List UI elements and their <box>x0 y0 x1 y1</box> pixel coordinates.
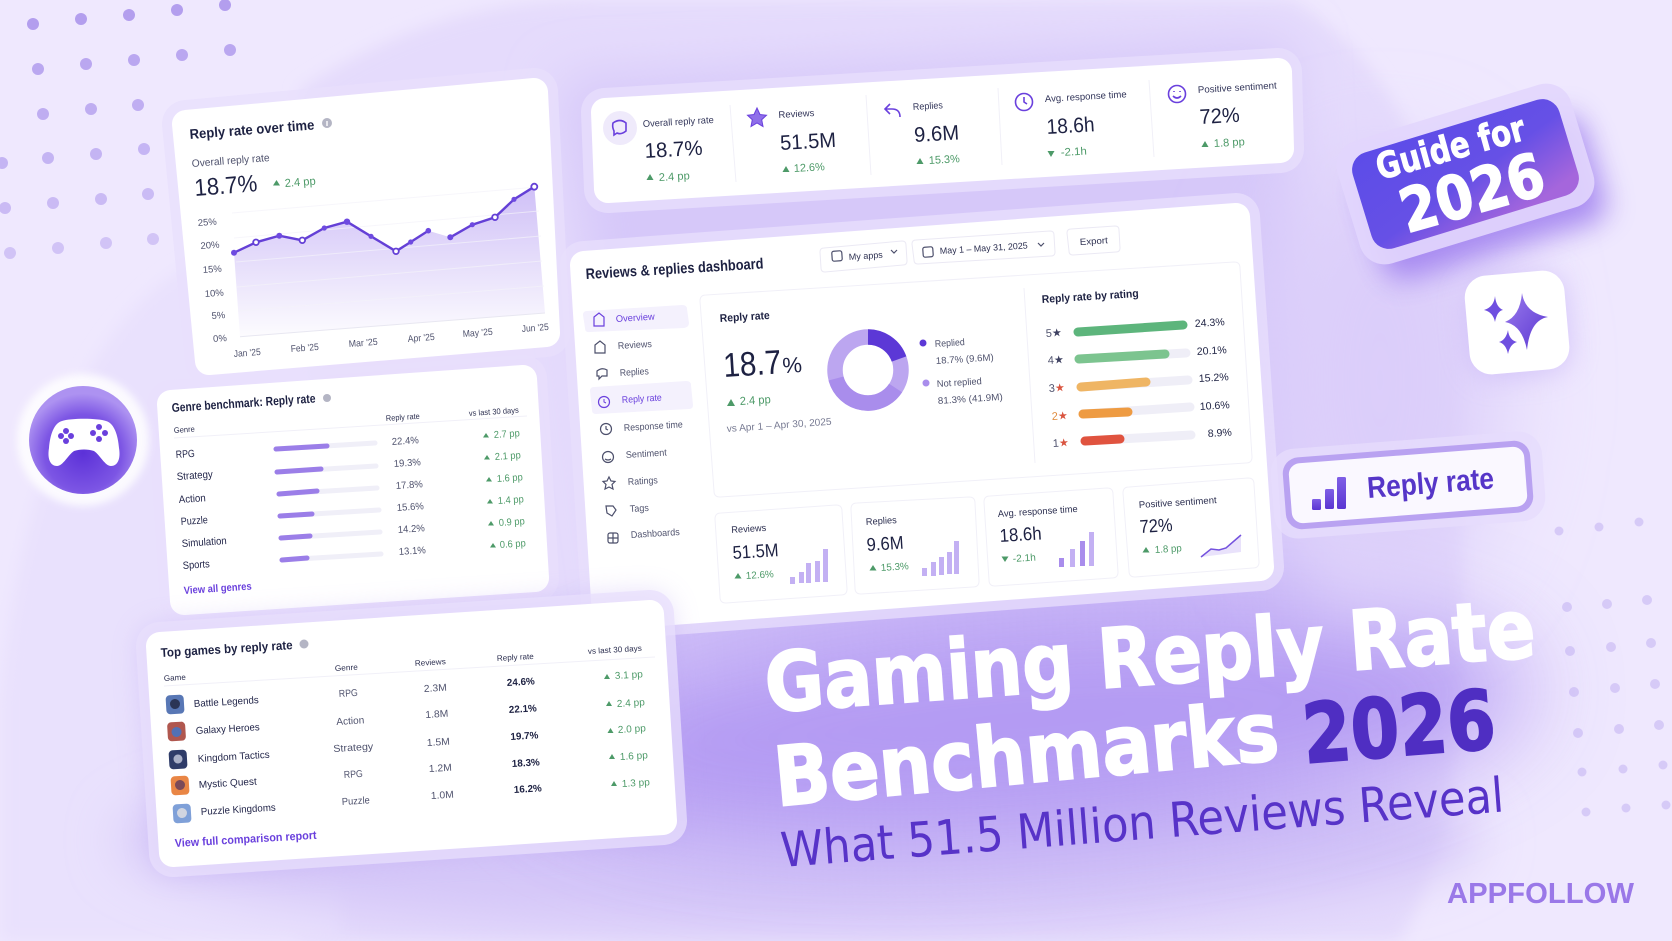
game names: Battle Legends <box>194 695 259 710</box>
rating labels <box>1045 316 1232 450</box>
main title: 2026 <box>1299 673 1499 783</box>
mini card: positive sentiment: 72% <box>1139 514 1173 537</box>
info icon <box>322 118 332 128</box>
mini card: response time: -2.1h <box>1012 553 1036 565</box>
reply rate value: 18.7% <box>722 342 803 385</box>
panel: reviews and replies dashboard <box>583 217 1260 616</box>
game reply rates: 19.7% <box>510 730 539 743</box>
mini card: reviews: 12.6% <box>745 569 774 582</box>
genre values: 22.4% <box>391 435 419 448</box>
game changes: 1.3 pp <box>622 777 651 790</box>
kpi: reviews: Reviews <box>778 108 815 121</box>
table headers: Genre <box>335 663 359 673</box>
donut legend: Replied <box>934 337 965 350</box>
game names: Puzzle Kingdoms <box>201 803 276 818</box>
nav tags: Tags <box>630 503 649 515</box>
mini card: response time <box>984 488 1118 586</box>
rating labels: 5★ <box>1045 327 1062 340</box>
genre values: 17.8% <box>395 479 423 492</box>
genre changes: 1.4 pp <box>497 494 525 507</box>
mini card: response time: Avg. response time <box>997 504 1078 520</box>
comparison period: vs Apr 1 – Apr 30, 2025 <box>726 417 832 435</box>
kpi: replies: Replies <box>913 100 943 113</box>
game reply rates <box>507 676 542 796</box>
genre names: Strategy <box>176 469 214 483</box>
game review counts: 1.2M <box>429 763 452 775</box>
my apps dropdown: My apps <box>848 250 884 262</box>
mini card: response time: 18.6h <box>999 522 1042 546</box>
main title: Benchmarks <box>770 685 1283 826</box>
overall value: 18.7% <box>193 170 258 202</box>
view all genres link: View all genres <box>183 581 252 597</box>
icon: sparkle tile <box>1463 269 1572 379</box>
x axis labels: Mar '25 <box>348 337 378 350</box>
game genres: RPG <box>344 769 363 781</box>
kpi: positive sentiment <box>1168 80 1277 150</box>
game review counts <box>424 683 454 802</box>
y axis labels: 0% <box>213 333 228 345</box>
game review counts: 2.3M <box>424 683 447 695</box>
game changes: 1.6 pp <box>620 750 649 763</box>
nav tags <box>606 503 649 516</box>
badge: guide for 2026: Guide for <box>1371 108 1530 189</box>
nav reply rate <box>598 393 662 408</box>
game reply rates: 24.6% <box>507 676 535 689</box>
game genres: Strategy <box>333 742 374 755</box>
decorative dots top left <box>0 0 236 259</box>
y axis labels: 15% <box>202 264 223 276</box>
genre values: 19.3% <box>393 457 421 470</box>
nav reply rate: Reply rate <box>622 393 662 406</box>
game genres <box>333 688 374 808</box>
kpi: overall reply rate: Overall reply rate <box>643 115 714 130</box>
nav sentiment: Sentiment <box>626 447 667 461</box>
rating labels: 8.9% <box>1207 427 1232 440</box>
kpi: reviews: 51.5M <box>779 129 837 155</box>
game changes: 2.0 pp <box>618 723 647 736</box>
genre changes: 2.7 pp <box>493 428 521 441</box>
game changes <box>604 669 651 790</box>
panel: genre benchmark <box>171 379 535 601</box>
table headers: vs last 30 days <box>588 644 642 656</box>
y axis labels: 10% <box>204 288 225 300</box>
table headers <box>164 644 655 686</box>
reply rate heading: Reply rate <box>719 310 770 325</box>
kpi: average response time: 18.6h <box>1046 113 1095 139</box>
nav overview <box>594 312 655 326</box>
game changes: 2.4 pp <box>617 697 646 710</box>
kpi: overall reply rate: 18.7% <box>644 137 703 163</box>
x axis labels: Apr '25 <box>407 332 435 345</box>
game genres: RPG <box>339 688 358 700</box>
nav overview: Overview <box>616 312 655 325</box>
rating heading: Reply rate by rating <box>1041 288 1139 306</box>
kpi: reviews <box>748 108 837 175</box>
export button <box>1067 226 1120 255</box>
y axis labels: 5% <box>211 310 226 322</box>
mini card: reviews: Reviews <box>731 523 767 536</box>
game names <box>194 695 276 818</box>
y axis labels <box>197 217 228 345</box>
nav replies: Replies <box>620 366 649 379</box>
panel: top games by reply rate <box>160 614 663 853</box>
genre names: Simulation <box>181 535 227 550</box>
x axis labels <box>233 322 549 360</box>
genre names: Puzzle <box>180 514 208 528</box>
rating labels: 10.6% <box>1199 399 1230 413</box>
my apps dropdown <box>820 241 907 272</box>
nav dashboards <box>608 527 680 543</box>
nav response time <box>600 419 683 434</box>
x axis labels: Jan '25 <box>233 347 261 360</box>
donut legend: 18.7% (9.6M) <box>935 352 994 367</box>
date dropdown: May 1 – May 31, 2025 <box>939 240 1028 256</box>
genre headers <box>174 406 527 438</box>
badge: guide for 2026: 2026 <box>1392 140 1553 247</box>
kpi: positive sentiment: Positive sentiment <box>1198 80 1277 96</box>
donut chart <box>835 337 901 403</box>
kpi: positive sentiment: 1.8 pp <box>1213 136 1245 150</box>
nav ratings: Ratings <box>628 475 658 488</box>
rating labels: 4★ <box>1047 354 1064 367</box>
rating labels: 20.1% <box>1196 344 1227 358</box>
game review counts: 1.5M <box>427 737 450 749</box>
kpi: replies: 15.3% <box>928 153 960 167</box>
game reply rates: 16.2% <box>514 783 542 796</box>
genre changes: 2.1 pp <box>494 450 522 463</box>
main title <box>762 582 1538 826</box>
genre bars <box>276 443 381 560</box>
reply rate and rating box <box>700 262 1252 497</box>
game genres: Action <box>336 715 365 728</box>
icon: game controller badge <box>17 374 149 506</box>
kpi: reviews: 12.6% <box>793 161 825 175</box>
subtitle: What 51.5 Million Reviews Reveal <box>779 768 1506 879</box>
mini card: positive sentiment <box>1123 478 1259 577</box>
genre names: Sports <box>182 558 210 572</box>
genre info icon <box>323 394 331 402</box>
nav reviews <box>595 339 652 353</box>
y axis labels: 25% <box>197 217 218 229</box>
nav sentiment <box>602 447 667 462</box>
game icons <box>165 694 192 824</box>
badge: reply rate pill: Reply rate <box>1366 462 1495 505</box>
decorative dots bottom right <box>1554 518 1670 816</box>
comparison report link: View full comparison report <box>174 830 317 850</box>
genre names: Action <box>178 492 206 506</box>
game names: Mystic Quest <box>199 777 257 791</box>
genre names: RPG <box>175 448 195 461</box>
panel: KPI summary strip <box>603 72 1280 189</box>
genre changes: 0.9 pp <box>498 516 526 529</box>
game changes: 3.1 pp <box>615 669 644 682</box>
main title: Gaming Reply Rate <box>762 582 1538 732</box>
dashboard title: Reviews & replies dashboard <box>585 255 764 283</box>
kpi: average response time: -2.1h <box>1060 146 1087 159</box>
top games info icon <box>300 640 308 648</box>
genre changes: 1.6 pp <box>496 472 524 485</box>
table headers: Game <box>164 673 187 683</box>
rating labels: 3★ <box>1048 382 1065 395</box>
table headers: Reply rate <box>497 652 535 663</box>
sidebar navigation <box>583 305 693 543</box>
kpi: overall reply rate: 2.4 pp <box>658 170 690 184</box>
rating labels: 2★ <box>1051 410 1068 423</box>
overall label: Overall reply rate <box>191 152 270 170</box>
mini card: positive sentiment: 1.8 pp <box>1154 543 1183 556</box>
kpi: replies: 9.6M <box>913 121 960 147</box>
top games title: Top games by reply rate <box>160 638 293 660</box>
x axis labels: May '25 <box>462 327 493 340</box>
donut legend: Not replied <box>936 376 982 390</box>
genre title: Genre benchmark: Reply rate <box>171 391 316 415</box>
table headers: Reviews <box>415 657 446 668</box>
mini card: positive sentiment: Positive sentiment <box>1138 495 1217 511</box>
mini card: reviews <box>715 505 847 603</box>
kpi: replies <box>885 100 960 167</box>
overall change: 2.4 pp <box>284 176 316 190</box>
genre values: 15.6% <box>396 501 424 514</box>
export button: Export <box>1079 235 1109 247</box>
game reply rates: 18.3% <box>512 757 540 770</box>
chart title: Reply rate over time <box>189 116 315 142</box>
kpi: average response time <box>1016 89 1127 159</box>
reply rate change: 2.4 pp <box>739 394 771 408</box>
x axis labels: Feb '25 <box>290 342 319 355</box>
nav ratings <box>603 475 658 489</box>
genre values <box>391 435 426 558</box>
x axis labels: Jun '25 <box>521 322 549 335</box>
genre changes: 0.6 pp <box>499 538 527 551</box>
genre headers: Reply rate <box>386 412 421 423</box>
nav response time: Response time <box>624 419 683 434</box>
game names: Kingdom Tactics <box>198 750 270 765</box>
genre headers: vs last 30 days <box>469 406 519 418</box>
game reply rates: 22.1% <box>509 703 537 716</box>
game review counts: 1.0M <box>431 790 454 802</box>
genre headers: Genre <box>174 425 196 435</box>
rating labels: 24.3% <box>1194 316 1225 330</box>
nav dashboards: Dashboards <box>631 527 680 541</box>
genre changes <box>483 428 527 551</box>
kpi: positive sentiment: 72% <box>1199 104 1240 129</box>
rating labels: 1★ <box>1052 437 1069 450</box>
panel: reply rate over time <box>186 92 549 361</box>
nav reviews: Reviews <box>618 339 652 352</box>
line chart <box>231 184 545 337</box>
nav replies <box>597 366 649 379</box>
mini card: reviews: 51.5M <box>732 539 779 563</box>
badge: reply rate pill <box>1269 430 1547 540</box>
rating labels: 15.2% <box>1198 371 1229 385</box>
brand logo: APPFOLLOW <box>1447 878 1635 910</box>
game review counts: 1.8M <box>425 709 449 721</box>
mini card: replies: 9.6M <box>866 532 904 555</box>
game names: Galaxy Heroes <box>196 722 260 737</box>
donut legend <box>920 337 1003 407</box>
genre values: 13.1% <box>398 545 426 558</box>
kpi dividers <box>730 80 1154 182</box>
mini card: replies <box>851 497 979 594</box>
mini card: replies: 15.3% <box>880 561 909 574</box>
badge: guide for 2026 <box>1330 77 1611 285</box>
genre values: 14.2% <box>397 523 425 536</box>
genre names <box>175 448 227 572</box>
game genres: Puzzle <box>342 795 371 808</box>
mini card: replies: Replies <box>865 515 897 528</box>
y axis labels: 20% <box>200 240 220 252</box>
donut legend: 81.3% (41.9M) <box>937 392 1003 407</box>
rating bars <box>1078 325 1191 441</box>
kpi: overall reply rate <box>603 111 714 184</box>
date dropdown <box>912 231 1055 264</box>
kpi: average response time: Avg. response time <box>1045 89 1127 105</box>
